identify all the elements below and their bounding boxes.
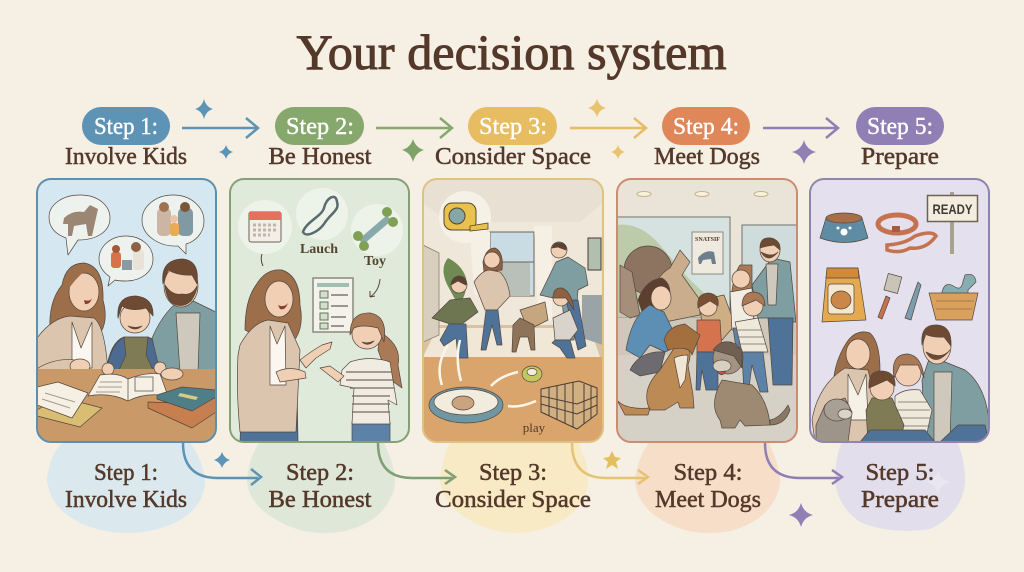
measuring tape circle — [439, 191, 491, 243]
label: step 3 — [435, 460, 591, 513]
grey dog — [713, 342, 790, 428]
adoption poster: SNATSIF — [695, 237, 720, 243]
sparkle blue small — [219, 145, 233, 159]
step 3 label: Consider Space — [435, 144, 591, 170]
step 2 pill: Step 2: — [286, 114, 354, 140]
label: step 2: Be Honest — [268, 487, 372, 513]
panel: step 1 involve kids — [37, 179, 216, 442]
arrow 3 to 4 — [570, 118, 646, 138]
play label: play — [523, 420, 546, 435]
step 5 pill: Step 5: — [867, 114, 933, 140]
label: step 1: Step 1: — [94, 460, 158, 486]
ready sign: READY — [932, 201, 973, 217]
bottom blob: step 4 — [635, 436, 780, 533]
step 5 pill — [856, 107, 944, 145]
label: step 2: Step 2: — [286, 460, 354, 486]
basket with toys — [929, 274, 978, 320]
step 3 pill — [468, 107, 557, 145]
step 1 pill: Step 1: — [94, 114, 158, 140]
girl striped — [735, 292, 768, 395]
faint sparkle on blob — [925, 470, 951, 494]
ceiling lights — [637, 192, 768, 196]
circle: calendar — [238, 200, 292, 254]
sparkle yellow large — [588, 99, 606, 117]
woman kneeling — [626, 278, 680, 376]
label: step 3: Step 3: — [479, 460, 547, 486]
arrow 2 to 3 — [376, 118, 452, 138]
panel: step 2 be honest — [230, 179, 409, 442]
sofa — [582, 295, 603, 345]
arrow 4 to 5 — [763, 118, 838, 138]
table — [37, 369, 216, 442]
sparkle green — [402, 139, 424, 162]
checklist — [313, 278, 353, 332]
sparkle blue large — [195, 99, 213, 119]
plant — [444, 258, 466, 300]
brown dog — [617, 324, 700, 415]
label: step 1: Involve Kids — [65, 487, 187, 513]
arrow 1 to 2 — [182, 118, 258, 138]
woman talking — [237, 270, 332, 442]
girl kneeling — [552, 288, 578, 358]
step 1 pill — [82, 107, 170, 145]
toy label: Toy — [364, 254, 386, 269]
boy — [108, 296, 158, 369]
top step row — [65, 99, 944, 170]
step 4 label: Meet Dogs — [654, 144, 760, 170]
girl in background — [730, 265, 754, 355]
panel: step 5 prepare — [810, 179, 989, 442]
label: step 4 — [655, 460, 761, 513]
woman — [37, 263, 108, 373]
step 4 pill: Step 4: — [673, 114, 739, 140]
dog bed — [429, 387, 503, 423]
connector arrow 3 to 4 — [572, 443, 648, 484]
boy — [696, 293, 722, 390]
step 1 label: Involve Kids — [65, 144, 187, 170]
hands — [102, 362, 183, 380]
circle: leash — [296, 188, 348, 240]
rug — [423, 328, 600, 357]
label: step 5: Prepare — [861, 487, 939, 513]
bottom sparkle purple — [789, 503, 813, 527]
bottom labels — [65, 460, 939, 513]
bookshelf — [423, 245, 439, 342]
title: Your decision system — [296, 24, 727, 80]
label: step 2 — [268, 460, 372, 513]
collar and leash — [878, 215, 936, 252]
right doorway — [742, 225, 797, 330]
bottom blob: step 1 — [47, 436, 205, 533]
dogs background — [620, 246, 735, 340]
wall picture — [588, 238, 601, 270]
bottom star yellow — [603, 451, 621, 469]
step 3 pill: Step 3: — [479, 114, 547, 140]
connector arrow 2 to 3 — [378, 443, 455, 484]
bottom blob: step 2 — [247, 436, 395, 533]
bottom blob: step 5 — [835, 436, 965, 531]
family group — [812, 325, 989, 442]
man — [752, 238, 796, 385]
dog and boxes — [512, 302, 548, 352]
comb — [905, 282, 921, 320]
panel 1 border — [37, 179, 216, 442]
boy running — [432, 276, 478, 358]
floor — [617, 355, 797, 442]
adoption poster — [692, 232, 723, 274]
book stack left — [37, 382, 102, 427]
girl — [320, 313, 402, 442]
book stack right — [148, 387, 216, 428]
panel 4 border — [617, 179, 797, 442]
brush — [878, 273, 902, 319]
sparkle yellow small — [611, 145, 625, 159]
label: step 4: Step 4: — [674, 460, 742, 486]
connector arrow 4 to 5 — [765, 443, 842, 484]
woman standing — [474, 248, 510, 350]
wall base — [617, 318, 797, 355]
step 2 label: Be Honest — [268, 144, 372, 170]
food bag — [822, 268, 866, 322]
leash label: Lauch — [300, 242, 338, 257]
speech bubble: family — [142, 195, 204, 254]
step 2 pill — [275, 107, 364, 145]
curved pointers — [261, 254, 380, 297]
floor — [423, 357, 603, 442]
man — [152, 259, 216, 372]
speech bubble: dog — [49, 195, 110, 255]
label: step 3: Consider Space — [435, 487, 591, 513]
connector arrow 1 to 2 — [183, 443, 261, 485]
man bending — [540, 242, 588, 350]
circle: toy bone — [351, 204, 403, 256]
step 4 pill — [662, 107, 750, 145]
panel 5 border — [810, 179, 989, 442]
white arrows — [440, 340, 536, 406]
label: step 4: Meet Dogs — [655, 487, 761, 513]
bottom blob: step 3 — [440, 436, 588, 533]
panel: step 3 consider space — [423, 179, 603, 442]
label: step 5: Step 5: — [866, 460, 934, 486]
panel: step 4 meet dogs — [617, 179, 797, 442]
sparkle purple — [792, 140, 816, 164]
step 5 label: Prepare — [861, 144, 939, 170]
crate — [541, 381, 597, 429]
window — [490, 232, 534, 296]
speech bubble: parent and kids — [99, 236, 153, 286]
open book — [88, 374, 168, 401]
label: step 1 — [65, 460, 187, 513]
panel 2 border — [230, 179, 409, 442]
panel 3 border — [423, 179, 603, 442]
toy roll — [522, 366, 542, 382]
small dog — [816, 398, 852, 442]
ready sign — [928, 192, 978, 254]
label: step 5 — [861, 460, 939, 513]
dog bowl — [820, 213, 868, 242]
curtains — [470, 226, 552, 320]
bottom sparkle blue — [214, 452, 230, 468]
window and trees — [617, 217, 730, 317]
